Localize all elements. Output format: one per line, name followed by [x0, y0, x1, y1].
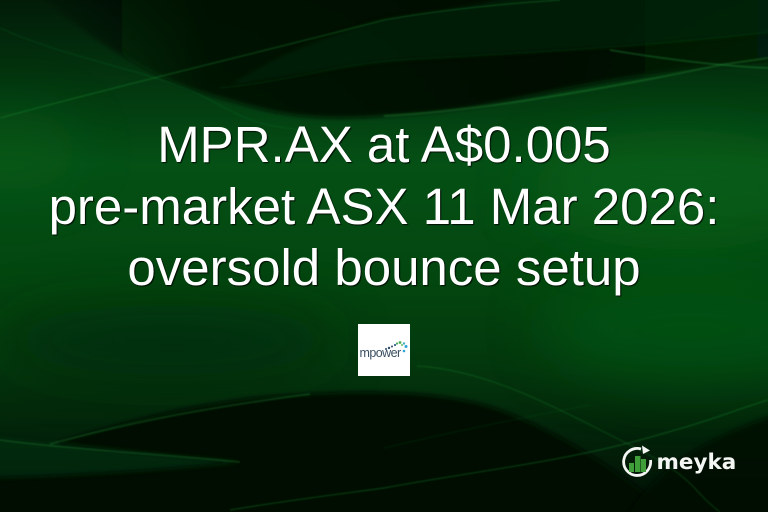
title	[49, 116, 719, 297]
title: oversold bounce setup	[127, 239, 641, 296]
title: MPR.AX at A$0.005	[157, 116, 611, 173]
wordmark: meyka: meyka	[656, 450, 736, 475]
logo: meyka	[622, 446, 736, 477]
title: pre-market ASX 11 Mar 2026:	[49, 178, 719, 234]
icon: meyka ring with bars	[624, 446, 651, 475]
wordmark: mpower: mpower	[360, 346, 401, 360]
logo: mpower	[358, 324, 410, 376]
icon: mpower dots	[385, 341, 408, 352]
